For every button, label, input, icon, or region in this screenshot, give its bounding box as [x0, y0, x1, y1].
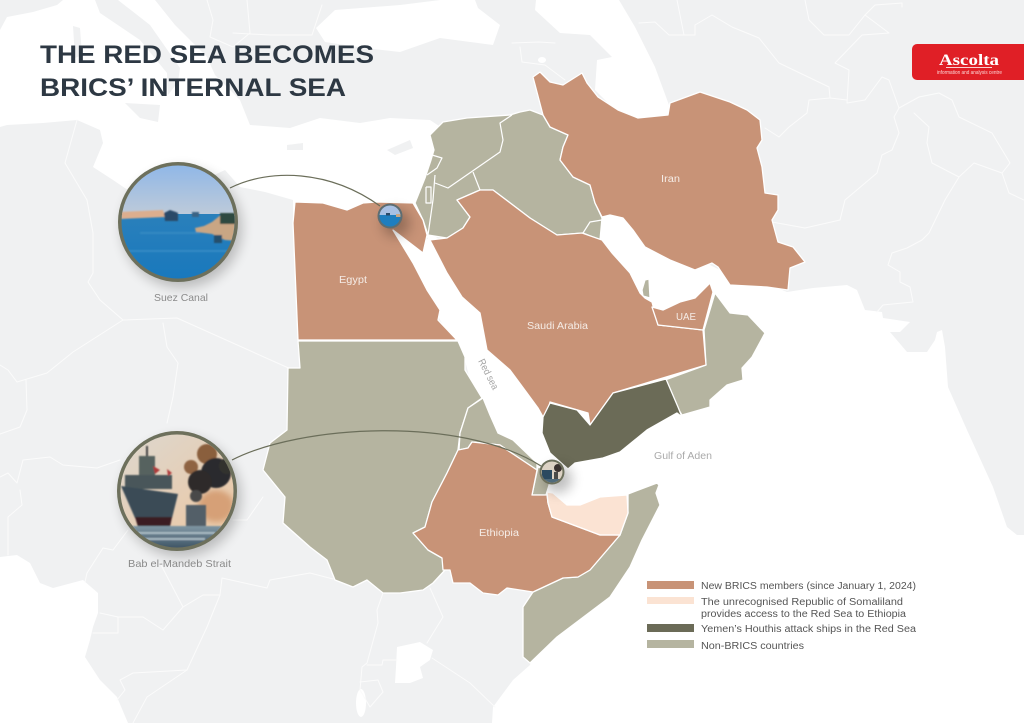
internal borders in the Levant and Iraq: [426, 115, 602, 235]
Qatar: [642, 279, 650, 298]
map of the region: [263, 72, 805, 663]
Djibouti: [532, 467, 556, 495]
legend item: Somaliland: provides access to the Red Sea to Ethiopia: [701, 609, 906, 620]
label: Red sea: Red sea: [475, 357, 500, 392]
indian ocean and persian gulf: [420, 205, 1024, 723]
title: [40, 41, 374, 102]
Egypt: [293, 202, 457, 340]
legend item: non-BRICS countries: Non-BRICS countries: [701, 641, 804, 652]
caspian sea: [535, 0, 669, 120]
Yemen: [542, 379, 682, 469]
legend item: non-BRICS countries: [647, 640, 804, 652]
Ethiopia: [413, 442, 620, 595]
marker: Suez Canal: [378, 204, 410, 237]
Somalia: [523, 483, 660, 663]
label: Suez Canal: Suez Canal: [154, 292, 208, 304]
legend: [647, 581, 916, 652]
logo: Ascolta: Ascolta: [939, 52, 999, 69]
photo: Suez Canal: [118, 162, 242, 288]
legend item: new BRICS members: New BRICS members (since January 1, 2024): [701, 581, 916, 592]
Somaliland: [547, 492, 628, 535]
legend item: Somaliland: [647, 597, 906, 620]
arc line: Suez Canal: [230, 175, 380, 206]
label: Iran: Iran: [661, 174, 680, 185]
mediterranean sea: [0, 0, 445, 260]
photo: Bab el-Mandeb Strait: [117, 431, 241, 557]
legend item: Somaliland: The unrecognised Republic of Somaliland: [701, 597, 903, 608]
Sudan: [263, 341, 482, 593]
grey islands: [125, 103, 160, 122]
label: Bab el-Mandeb Strait: Bab el-Mandeb Strait: [128, 558, 231, 570]
title: BRICS’ INTERNAL SEA: [40, 74, 346, 102]
Eritrea: [459, 398, 537, 470]
lakes: [395, 642, 433, 683]
label: Ethiopia: Ethiopia: [479, 528, 519, 539]
label: Egypt: Egypt: [339, 275, 367, 286]
arc line: Bab el-Mandeb Strait: [232, 431, 541, 466]
title: THE RED SEA BECOMES: [40, 41, 374, 69]
country labels: [339, 174, 696, 539]
Oman: [665, 293, 765, 415]
UAE: [652, 283, 713, 330]
label: Saudi Arabia: Saudi Arabia: [527, 321, 588, 332]
black sea: [316, 0, 500, 52]
label: Gulf of Aden: Gulf of Aden: [654, 451, 712, 462]
gulf of guinea: [0, 555, 128, 723]
logo: Ascolta: [912, 44, 1024, 80]
Saudi Arabia: [430, 190, 706, 425]
Levant and Iraq: [415, 110, 602, 240]
red sea: [393, 228, 565, 470]
legend item: Yemen's Houthis: Yemen’s Houthis attack ships in the Red Sea: [701, 624, 916, 635]
marker: Bab el-Mandeb Strait: [540, 460, 572, 493]
Iran: [533, 72, 805, 290]
label: UAE: UAE: [676, 312, 696, 323]
logo: Ascolta: information and analysis centre: [937, 70, 1002, 76]
